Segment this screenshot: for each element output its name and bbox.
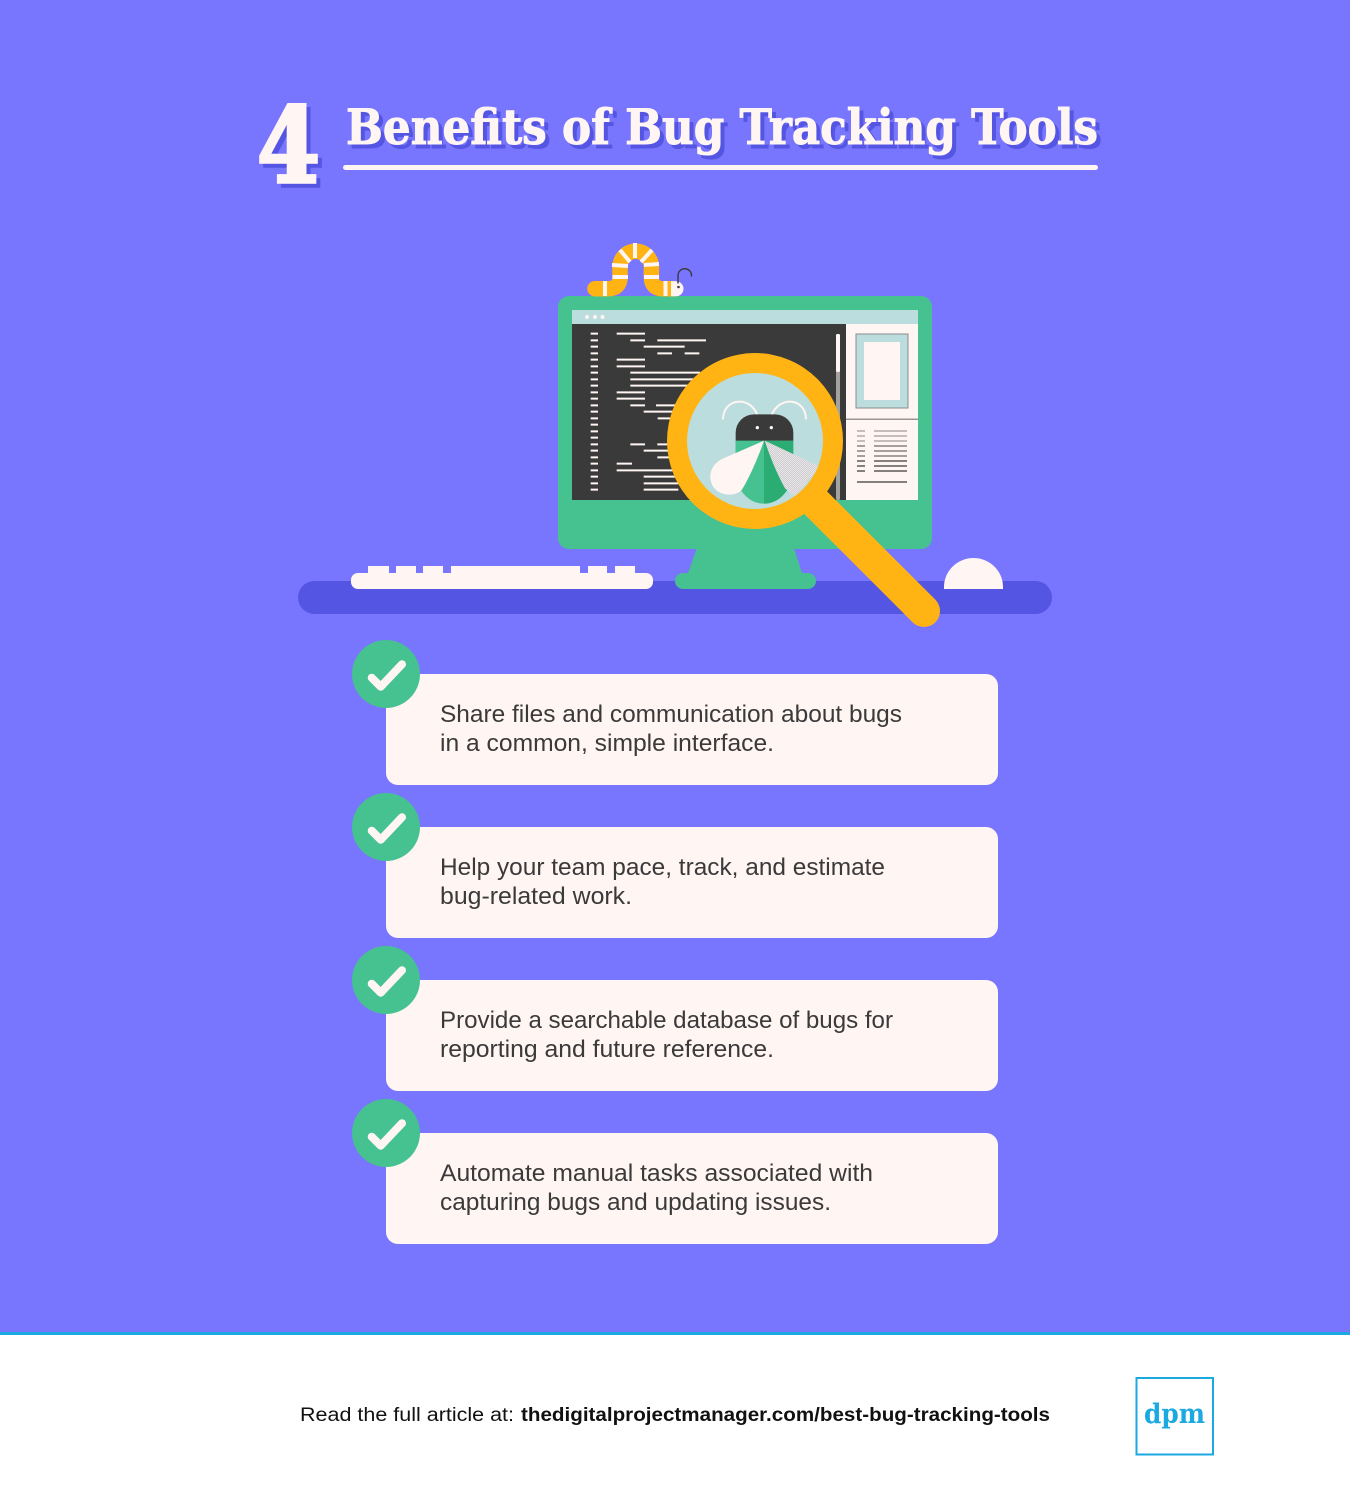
text: Help your team pace, track, and estimate (440, 854, 885, 881)
footer link text: Read the full article at: (300, 1405, 514, 1426)
text (440, 1160, 873, 1216)
text: capturing bugs and updating issues. (440, 1189, 831, 1216)
card (386, 827, 998, 938)
magnifier lens (687, 373, 823, 509)
scrollbar (836, 334, 840, 500)
dpm logo (1136, 1378, 1213, 1454)
title (257, 84, 1098, 207)
bug left wing (710, 441, 764, 495)
title number: 4 (257, 84, 320, 207)
monitor body (558, 296, 932, 549)
icon: check (352, 640, 420, 708)
browser title bar (572, 310, 918, 324)
text: Provide a searchable database of bugs for (440, 1007, 893, 1034)
text (440, 854, 885, 910)
footer link text (300, 1405, 1050, 1426)
card (386, 674, 998, 785)
monitor stand (675, 545, 816, 589)
footer link text: thedigitalprojectmanager.com/best-bug-tracking-tools (521, 1405, 1050, 1426)
icon: check (352, 946, 420, 1014)
bug head (736, 414, 793, 441)
code editor panel (572, 324, 846, 500)
dpm logo: dpm (1144, 1399, 1205, 1430)
icon: bug (710, 402, 820, 504)
bug right wing (765, 441, 820, 497)
footer (0, 1332, 1350, 1500)
code lines (617, 334, 706, 490)
side panel text lines (857, 431, 907, 482)
bug body (736, 440, 794, 454)
benefit card 4 (352, 1099, 998, 1244)
desk (298, 581, 1052, 614)
icon: check (352, 793, 420, 861)
card (386, 1133, 998, 1244)
side panel (846, 324, 918, 500)
text: bug-related work. (440, 883, 632, 910)
text: in a common, simple interface. (440, 730, 774, 757)
benefit card 2 (352, 793, 998, 938)
illustration: computer and bug (298, 243, 1052, 614)
footer rule (0, 1332, 1350, 1335)
worm (595, 243, 692, 296)
text: Automate manual tasks associated with (440, 1160, 873, 1187)
benefit card 3 (352, 946, 998, 1091)
bug abdomen (741, 458, 764, 504)
bug antennae (723, 402, 806, 419)
icon: check (352, 1099, 420, 1167)
mouse (944, 558, 1003, 589)
image placeholder (856, 334, 908, 408)
text (440, 701, 902, 757)
card (386, 980, 998, 1091)
keyboard (351, 566, 653, 589)
magnifier ring (667, 353, 843, 529)
text: reporting and future reference. (440, 1036, 774, 1063)
title text: Benefits of Bug Tracking Tools (346, 98, 1098, 156)
title underline (343, 165, 1098, 170)
text (440, 1007, 893, 1063)
magnifier handle (812, 499, 924, 611)
magnifying glass (667, 353, 924, 611)
line numbers (591, 334, 598, 490)
footer background (0, 1334, 1350, 1500)
benefit card 1 (352, 640, 998, 785)
text: Share files and communication about bugs (440, 701, 902, 728)
